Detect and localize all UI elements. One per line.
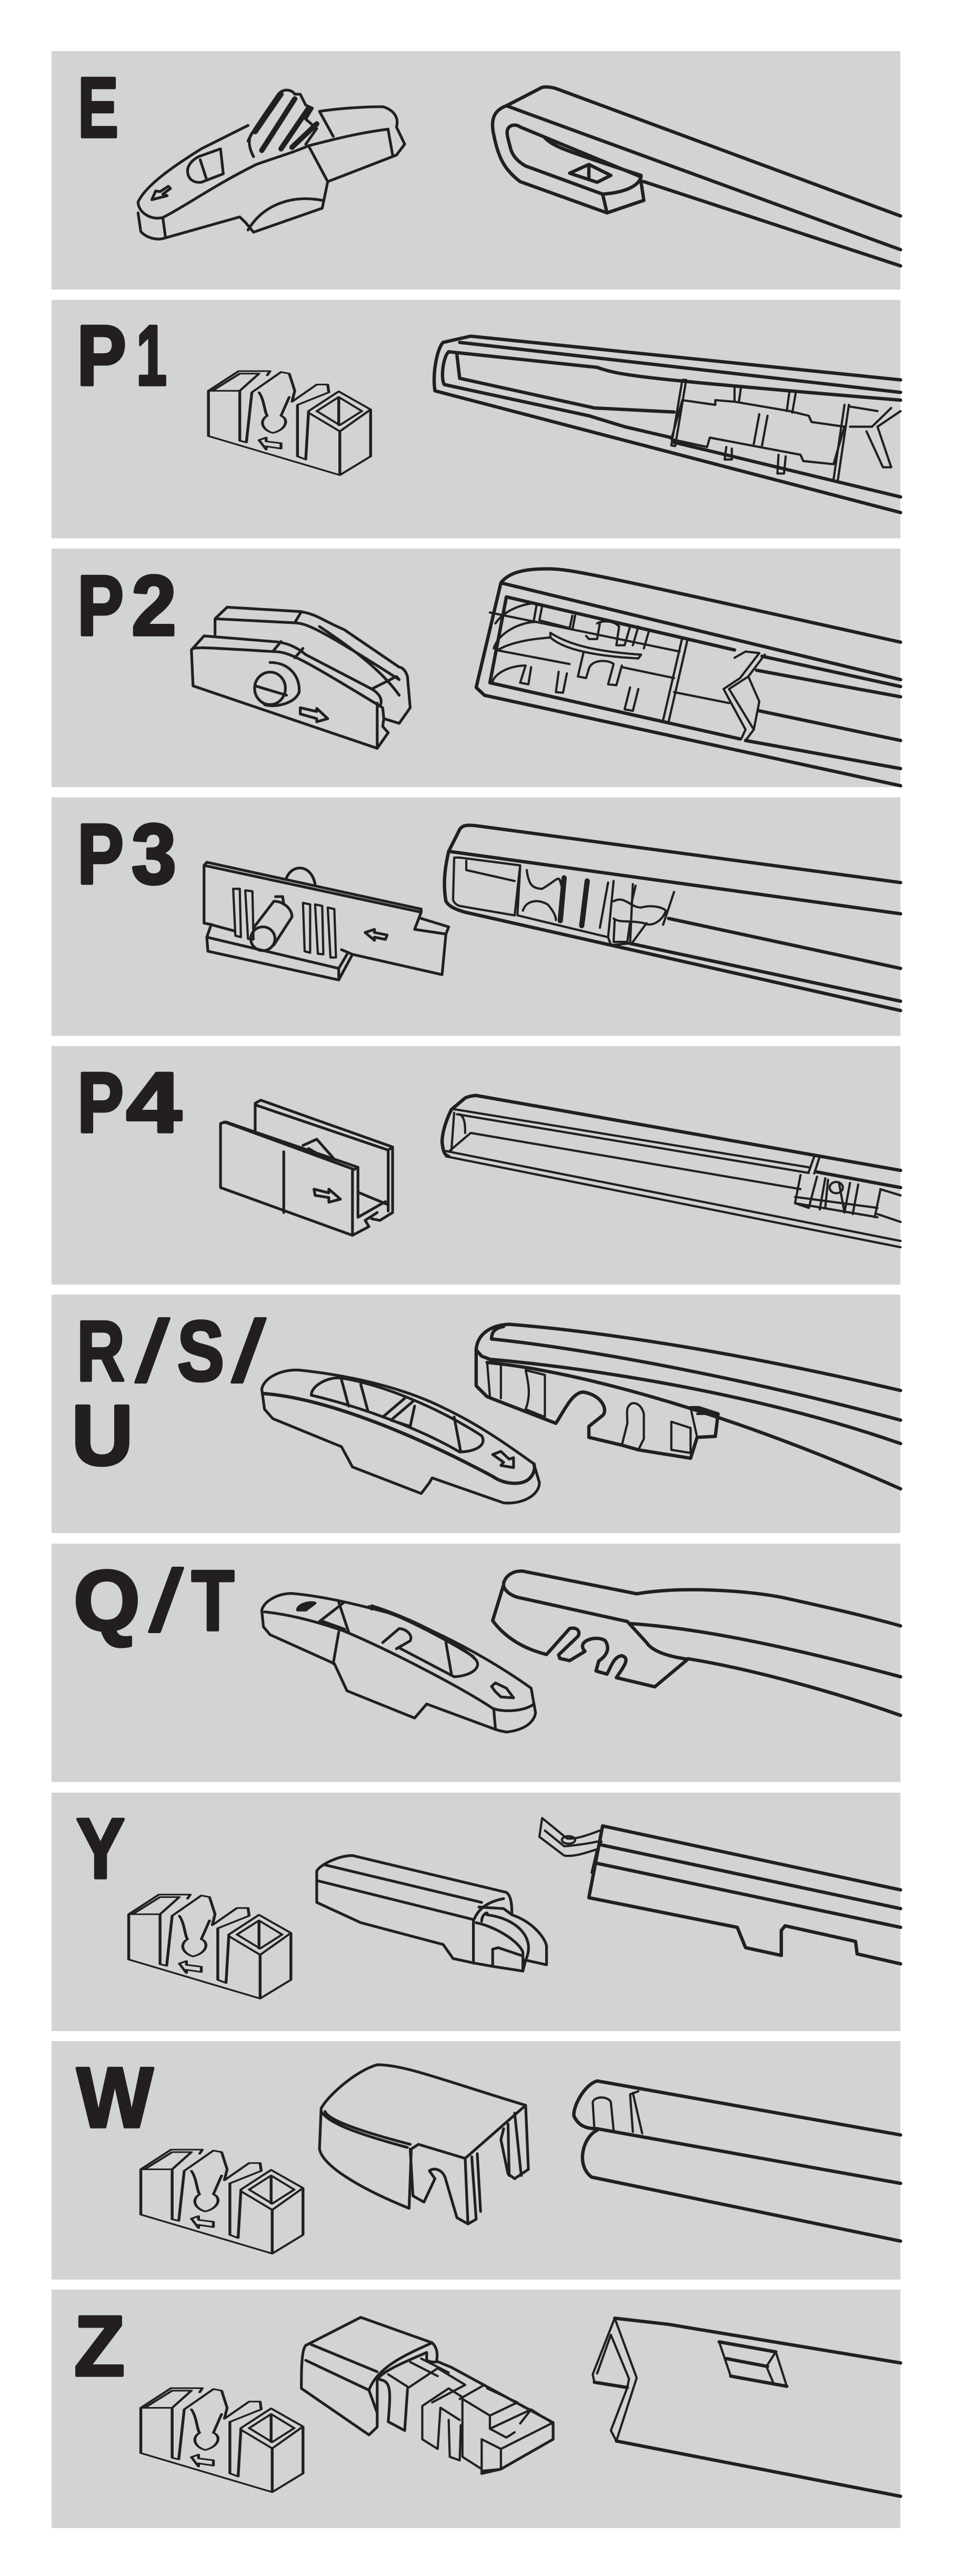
icon: R/S/U adapter (262, 1370, 539, 1503)
icon: P1 blade end (434, 336, 900, 513)
panel: E (52, 51, 900, 290)
panel: P4 (52, 1046, 900, 1285)
label: W: W (77, 2050, 153, 2145)
label: P2 (77, 558, 176, 653)
label: Y: Y (76, 1801, 125, 1896)
label: Q/T (74, 1553, 234, 1648)
icon: P3 adapter (204, 862, 449, 980)
label: P4: 4 (126, 1055, 182, 1150)
label: P4 (77, 1055, 182, 1150)
icon: P4 blade end (442, 1096, 900, 1247)
icon: E blade end (493, 87, 900, 266)
label: R/S/: / (228, 1303, 269, 1399)
panel: Y (52, 1793, 900, 2031)
icon: W blade end (574, 2081, 900, 2241)
icon: E adapter (138, 90, 405, 239)
icon: Y adapter cover (317, 1856, 547, 1971)
icon: P2 adapter (192, 607, 410, 748)
label: E: E (78, 60, 118, 155)
label: Z: Z (74, 2299, 125, 2394)
icon: Z adapter clip (141, 2388, 303, 2492)
label: P2: P (77, 558, 124, 653)
label: Q/T: / (146, 1553, 186, 1648)
label: P2: 2 (132, 558, 176, 653)
label: P3: 3 (132, 807, 176, 902)
panel: P3 (52, 797, 900, 1036)
panel: Q/T (52, 1544, 900, 1782)
icon: P2 blade end (476, 569, 900, 786)
panel: Z (52, 2290, 900, 2528)
label: P3 (77, 807, 176, 902)
icon: P4 adapter (220, 1100, 393, 1235)
panel: P2 (52, 549, 900, 787)
panel: W (52, 2041, 900, 2280)
label: U: U (72, 1388, 133, 1483)
label: P3: P (77, 807, 124, 902)
icon: P1 adapter (208, 371, 370, 475)
label: Q/T: T (192, 1553, 234, 1648)
icon: R/S/U blade end (476, 1324, 900, 1489)
icon: Y adapter clip (129, 1895, 291, 1998)
label: P1: P (77, 308, 126, 403)
icon: W adapter cover (319, 2065, 528, 2224)
icon: Z adapter connector (302, 2318, 553, 2473)
label: R/S/: R (77, 1304, 125, 1399)
icon: Z blade end (593, 2318, 900, 2497)
label: R/S/ (77, 1303, 269, 1399)
label: R/S/: S (177, 1304, 224, 1399)
icon: Y blade end (539, 1818, 900, 1964)
panel: P1 (52, 300, 900, 538)
label: R/S/: / (132, 1303, 173, 1399)
label: P1: 1 (136, 308, 167, 403)
icon: Q/T blade end (493, 1571, 900, 1715)
icon: P3 blade end (445, 825, 900, 1011)
panel: R/S/U (52, 1295, 900, 1533)
label: P1 (77, 308, 167, 403)
label: P4: P (77, 1055, 124, 1150)
icon: W adapter clip (141, 2150, 303, 2254)
label: Q/T: Q (74, 1553, 140, 1648)
icon: Q/T adapter (262, 1594, 536, 1732)
